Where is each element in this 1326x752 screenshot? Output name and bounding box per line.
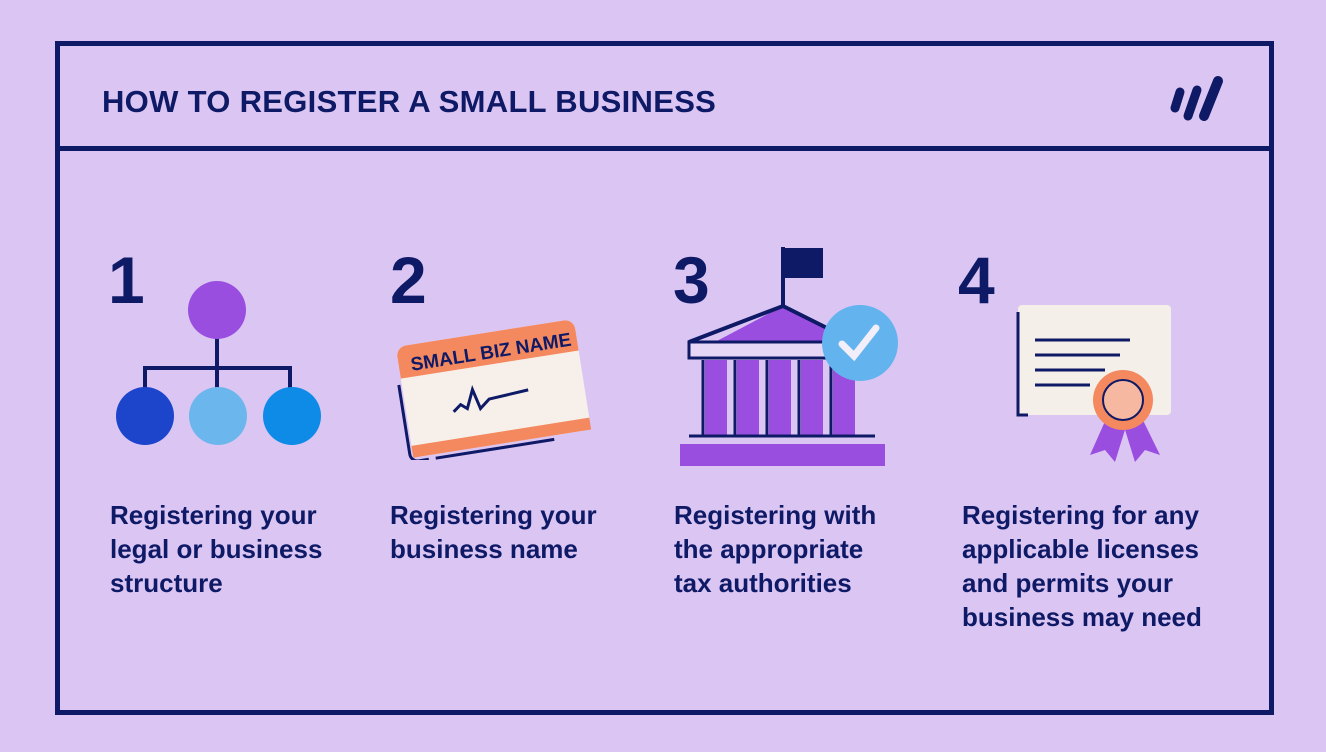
label 1: Registering your <box>110 500 317 530</box>
icon: name card <box>397 320 592 460</box>
icon: name card: SMALL BIZ NAME <box>409 330 573 376</box>
label 1: structure <box>110 568 223 598</box>
label 4: Registering for any <box>962 500 1199 530</box>
icon: org chart <box>116 281 321 445</box>
label 3: the appropriate <box>674 534 863 564</box>
icon: certificate <box>1016 305 1171 462</box>
label 1: legal or business <box>110 534 322 564</box>
label 2: Registering your <box>390 500 597 530</box>
label 2 <box>390 500 597 564</box>
title: HOW TO REGISTER A SMALL BUSINESS <box>102 84 716 119</box>
header <box>60 46 1269 151</box>
label 4: business may need <box>962 602 1202 632</box>
icon: government building <box>680 247 898 466</box>
step 1 number: 1 <box>108 243 145 317</box>
label 3 <box>674 500 876 598</box>
step 3 number: 3 <box>673 243 710 317</box>
label 4: and permits your <box>962 568 1173 598</box>
step 2 number: 2 <box>390 243 427 317</box>
step 4 number: 4 <box>958 243 995 317</box>
label 3: Registering with <box>674 500 876 530</box>
label 3: tax authorities <box>674 568 852 598</box>
label 1 <box>110 500 322 598</box>
icon: logo <box>1170 76 1223 121</box>
label 2: business name <box>390 534 578 564</box>
label 4: applicable licenses <box>962 534 1199 564</box>
label 4 <box>962 500 1202 632</box>
